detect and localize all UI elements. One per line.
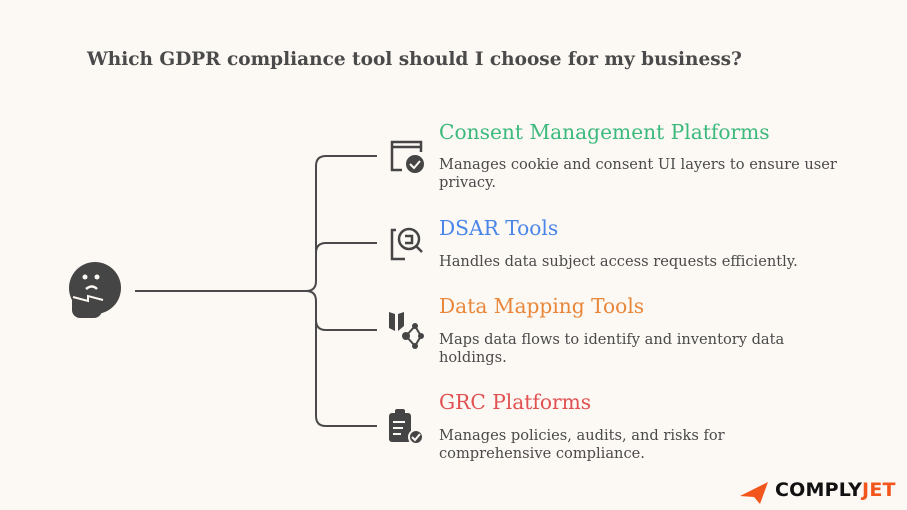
icon: data mapping	[389, 312, 424, 349]
branch 4 text	[439, 427, 725, 462]
branch 2 title: DSAR Tools	[439, 216, 558, 240]
branch 1 title: Consent Management Platforms	[439, 120, 770, 144]
branch 2 text: Handles data subject access requests efficiently.	[439, 253, 798, 270]
logo	[740, 479, 896, 504]
branch 4 title: GRC Platforms	[439, 390, 591, 414]
icon: consent window	[392, 142, 424, 173]
title: Which GDPR compliance tool should I choose for my business?	[87, 49, 742, 70]
branch 3 text: holdings.	[439, 349, 507, 366]
branch 3 text: Maps data flows to identify and inventory data	[439, 331, 784, 348]
branch 1 text	[439, 156, 837, 191]
branch 1 text: privacy.	[439, 174, 496, 191]
branch 4 text: Manages policies, audits, and risks for	[439, 427, 725, 444]
icon: DSAR search	[392, 229, 422, 259]
branch 4 text: comprehensive compliance.	[439, 445, 645, 462]
branch 3 text	[439, 331, 784, 366]
logo: COMPLYJET	[775, 479, 896, 501]
icon: thinking face	[69, 262, 121, 318]
branch 3 title: Data Mapping Tools	[439, 294, 644, 318]
branch 1 text: Manages cookie and consent UI layers to ensure user	[439, 156, 837, 173]
icon: GRC clipboard	[389, 409, 423, 444]
